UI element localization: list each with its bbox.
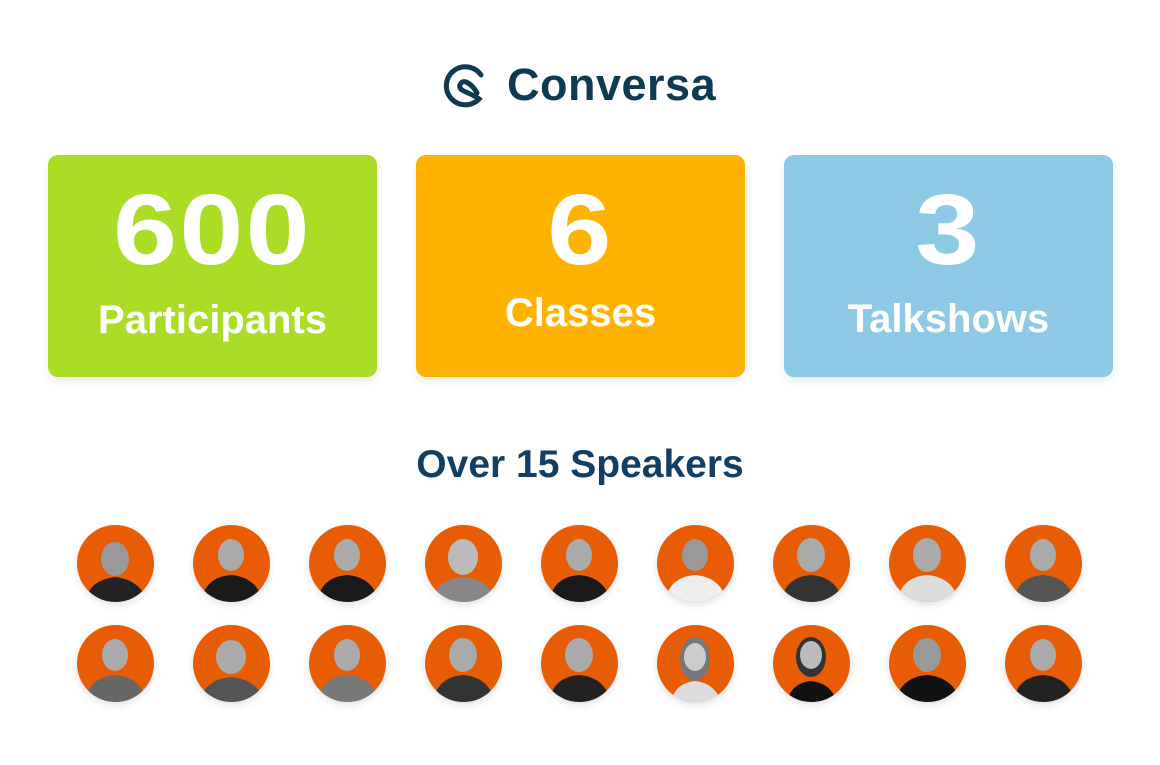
- speakers grid: [75, 525, 1084, 707]
- logo: [444, 59, 716, 110]
- logo text: Conversa: [507, 59, 716, 110]
- icon: logo mark: [444, 64, 484, 108]
- card: talkshows: [784, 155, 1113, 377]
- card: classes: Classes: [505, 291, 656, 335]
- card: talkshows: Talkshows: [848, 297, 1049, 341]
- heading: speakers: Over 15 Speakers: [416, 443, 744, 486]
- card: participants: 600: [113, 174, 312, 286]
- card: talkshows: 3: [915, 174, 982, 286]
- card: participants: [48, 155, 377, 377]
- card: classes: [416, 155, 745, 377]
- card: classes: 6: [547, 174, 614, 286]
- card: participants: Participants: [98, 298, 327, 342]
